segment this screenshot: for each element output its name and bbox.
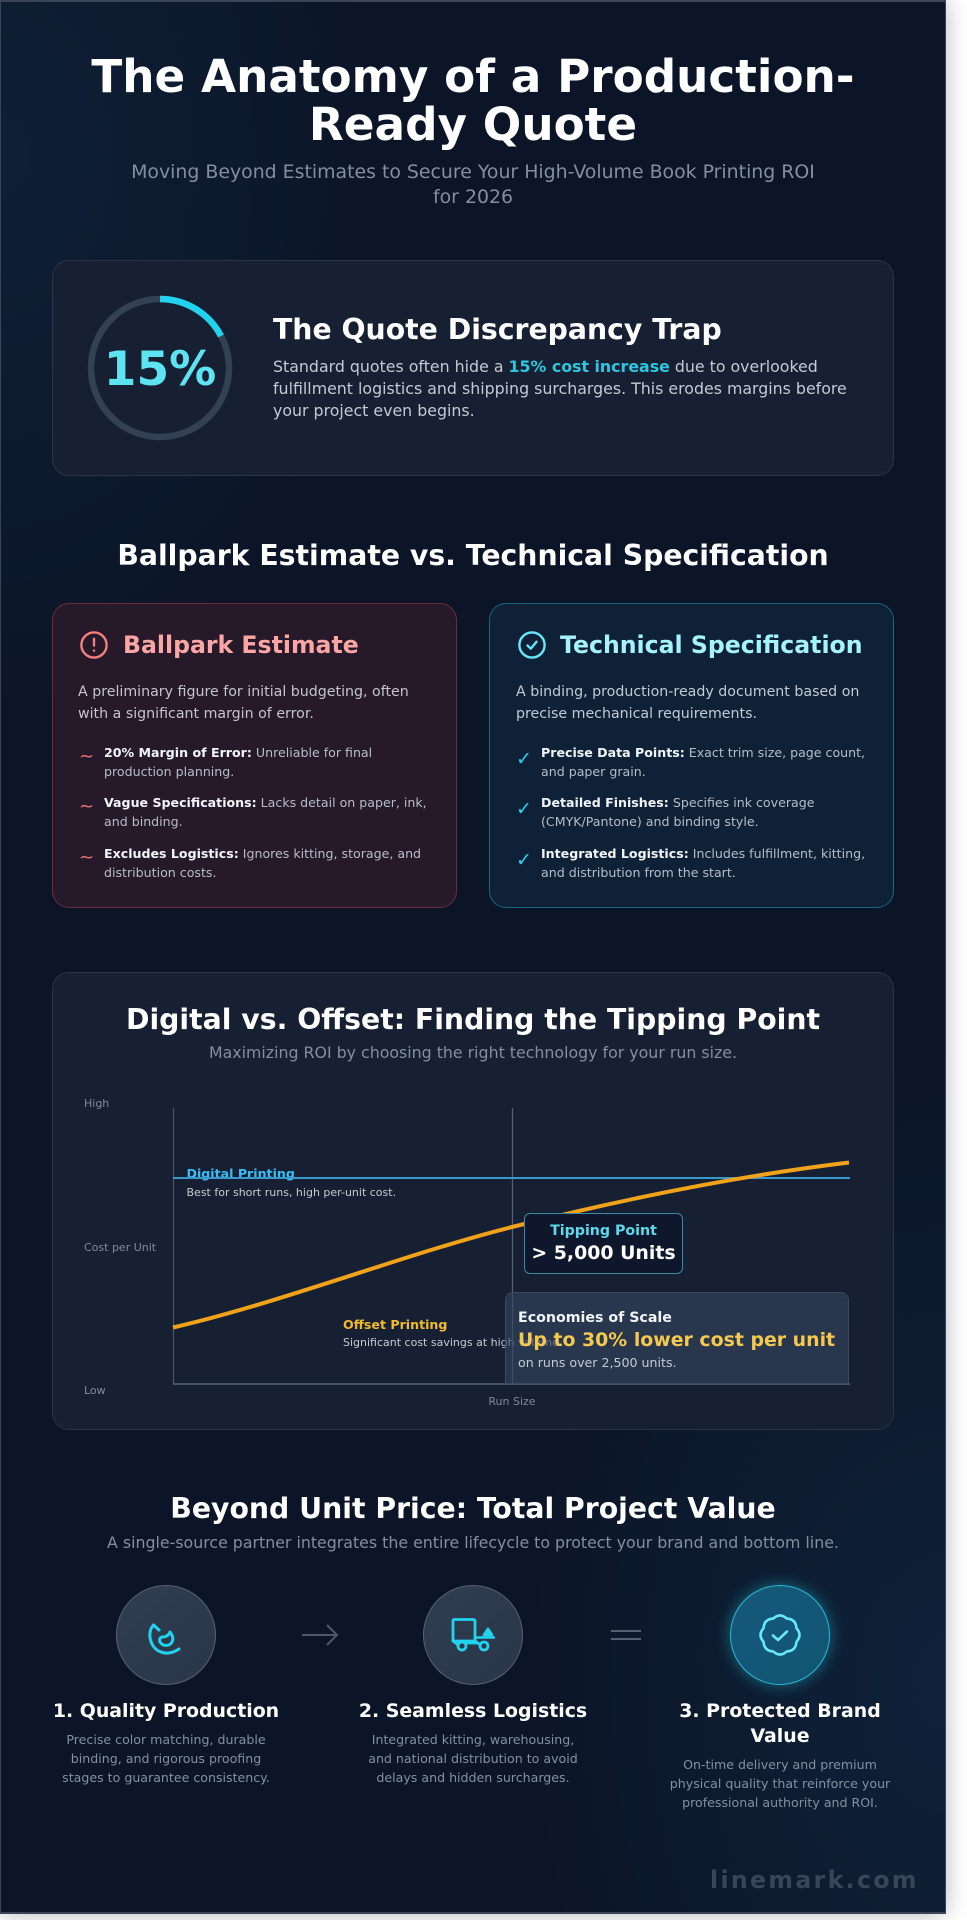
plot lines [172, 1108, 850, 1385]
step 3 description: On-time delivery and premium [683, 1756, 877, 1772]
stat: 15%: 15% [104, 342, 216, 397]
heading: Ballpark Estimate [123, 631, 359, 659]
step 3 title: 3. Protected Brand [679, 1700, 881, 1722]
bullet text: Precise Data Points: Exact trim size, page count, [541, 745, 865, 760]
axis label: high: High [84, 1097, 109, 1110]
step 1 description [62, 1732, 270, 1784]
bullet mark: ✓ [516, 798, 532, 820]
panel: technical specification [489, 603, 894, 908]
arrow: leads to [302, 1624, 338, 1646]
note: offset printing: Significant cost savings at high volume. [343, 1336, 562, 1349]
panel: quote discrepancy trap [52, 260, 894, 476]
bullet text: Vague Specifications: Lacks detail on paper, ink, [104, 795, 427, 810]
bullet text: production planning. [104, 764, 234, 779]
icon: check circle [518, 631, 546, 659]
title [91, 50, 855, 151]
bullet text: distribution costs. [104, 865, 216, 880]
note: digital printing: Best for short runs, high per-unit cost. [186, 1186, 396, 1199]
axis label: run size: Run Size [488, 1395, 536, 1408]
panel: ballpark estimate [52, 603, 457, 908]
bullet text: and distribution from the start. [541, 865, 736, 880]
subheading: digital vs offset: Maximizing ROI by choosing the right technology for your run size. [209, 1043, 737, 1062]
bullet text [104, 846, 421, 880]
heading: Technical Specification [560, 631, 863, 659]
bullet text [541, 846, 865, 880]
body text: Standard quotes often hide a 15% cost increase due to overlooked [273, 357, 818, 376]
step 1 description: stages to guarantee consistency. [62, 1770, 270, 1784]
heading: digital vs offset: Digital vs. Offset: Finding the Tipping Point [126, 1003, 820, 1036]
step 3 description [670, 1756, 890, 1810]
bullet text: and binding. [104, 814, 183, 829]
description: A binding, production-ready document based on [516, 684, 859, 700]
description [78, 684, 409, 722]
step 1 description: binding, and rigorous proofing [71, 1750, 261, 1766]
bullet text [104, 745, 372, 779]
description: A preliminary figure for initial budgeting, often [78, 684, 409, 700]
bullet mark: ✓ [516, 849, 532, 871]
heading: total project value: Beyond Unit Price: Total Project Value [170, 1492, 776, 1525]
description [516, 684, 859, 722]
icon: seamless logistics [423, 1585, 523, 1685]
subtitle: for 2026 [433, 186, 513, 208]
step 2 title: 2. Seamless Logistics [359, 1700, 587, 1722]
label: digital printing: Digital Printing [186, 1166, 295, 1181]
bullet text: Excludes Logistics: Ignores kitting, storage, and [104, 846, 421, 861]
bullet text: (CMYK/Pantone) and binding style. [541, 814, 759, 829]
step 2 description: and national distribution to avoid [368, 1750, 578, 1766]
watermark: linemark.com [710, 1866, 919, 1894]
title: The Anatomy of a Production- [91, 50, 855, 103]
panel: digital vs offset [52, 972, 894, 1430]
step 3 description: professional authority and ROI. [682, 1794, 878, 1810]
callout label: Tipping Point [550, 1223, 657, 1239]
body text: fulfillment logistics and shipping surcharges. This erodes margins before [273, 379, 847, 398]
step 2 description: delays and hidden surcharges. [376, 1770, 570, 1784]
chart: 15% progress ring [88, 296, 232, 440]
bullet text: and paper grain. [541, 764, 646, 779]
step 2 description: Integrated kitting, warehousing, [372, 1732, 574, 1746]
icon: alert circle [80, 631, 108, 659]
bullet text [541, 795, 814, 829]
step 3 title: Value [750, 1725, 810, 1747]
title: Ready Quote [309, 98, 637, 151]
list: drawbacks [79, 745, 427, 880]
icon: protected brand value [730, 1585, 830, 1685]
bullet mark: ~ [79, 796, 94, 817]
body text [273, 357, 847, 420]
section heading: comparison: Ballpark Estimate vs. Technical Specification [117, 539, 829, 572]
step 1 description: Precise color matching, durable [66, 1732, 266, 1746]
step 3 title [679, 1700, 881, 1747]
step 1 title: 1. Quality Production [53, 1700, 279, 1722]
icon: quality production [116, 1585, 216, 1685]
description: with a significant margin of error. [78, 706, 314, 722]
step 3 description: physical quality that reinforce your [670, 1776, 890, 1790]
step 2 description [368, 1732, 578, 1784]
callout: economies of scale [505, 1292, 849, 1384]
callout: tipping point [524, 1213, 683, 1274]
bullet text: Integrated Logistics: Includes fulfillment, kitting, [541, 846, 865, 861]
bullet text: 20% Margin of Error: Unreliable for final [104, 745, 372, 760]
description: precise mechanical requirements. [516, 706, 757, 722]
bullet text [104, 795, 427, 829]
callout heading: Economies of Scale [518, 1310, 672, 1326]
body text: your project even begins. [273, 401, 475, 420]
bullet mark: ✓ [516, 748, 532, 770]
axis label: low: Low [84, 1384, 106, 1397]
subtitle [131, 160, 815, 208]
bullet mark: ~ [79, 746, 94, 767]
callout value: > 5,000 Units [531, 1242, 676, 1264]
label: offset printing: Offset Printing [343, 1317, 447, 1332]
subheading: total project value: A single-source partner integrates the entire lifecycle to protect your brand and bottom line. [107, 1533, 839, 1552]
callout value: Up to 30% lower cost per unit [518, 1329, 835, 1351]
list: strengths [516, 745, 865, 880]
callout note: on runs over 2,500 units. [518, 1354, 677, 1370]
symbol: equals [611, 1630, 641, 1640]
subtitle: Moving Beyond Estimates to Secure Your High-Volume Book Printing ROI [131, 160, 815, 182]
bullet mark: ~ [79, 847, 94, 868]
bullet text [541, 745, 865, 779]
chart: cost per unit vs run size [84, 1097, 850, 1408]
heading: The Quote Discrepancy Trap [273, 313, 722, 346]
bullet text: Detailed Finishes: Specifies ink coverage [541, 795, 814, 810]
axis label: cost per unit: Cost per Unit [84, 1241, 156, 1254]
